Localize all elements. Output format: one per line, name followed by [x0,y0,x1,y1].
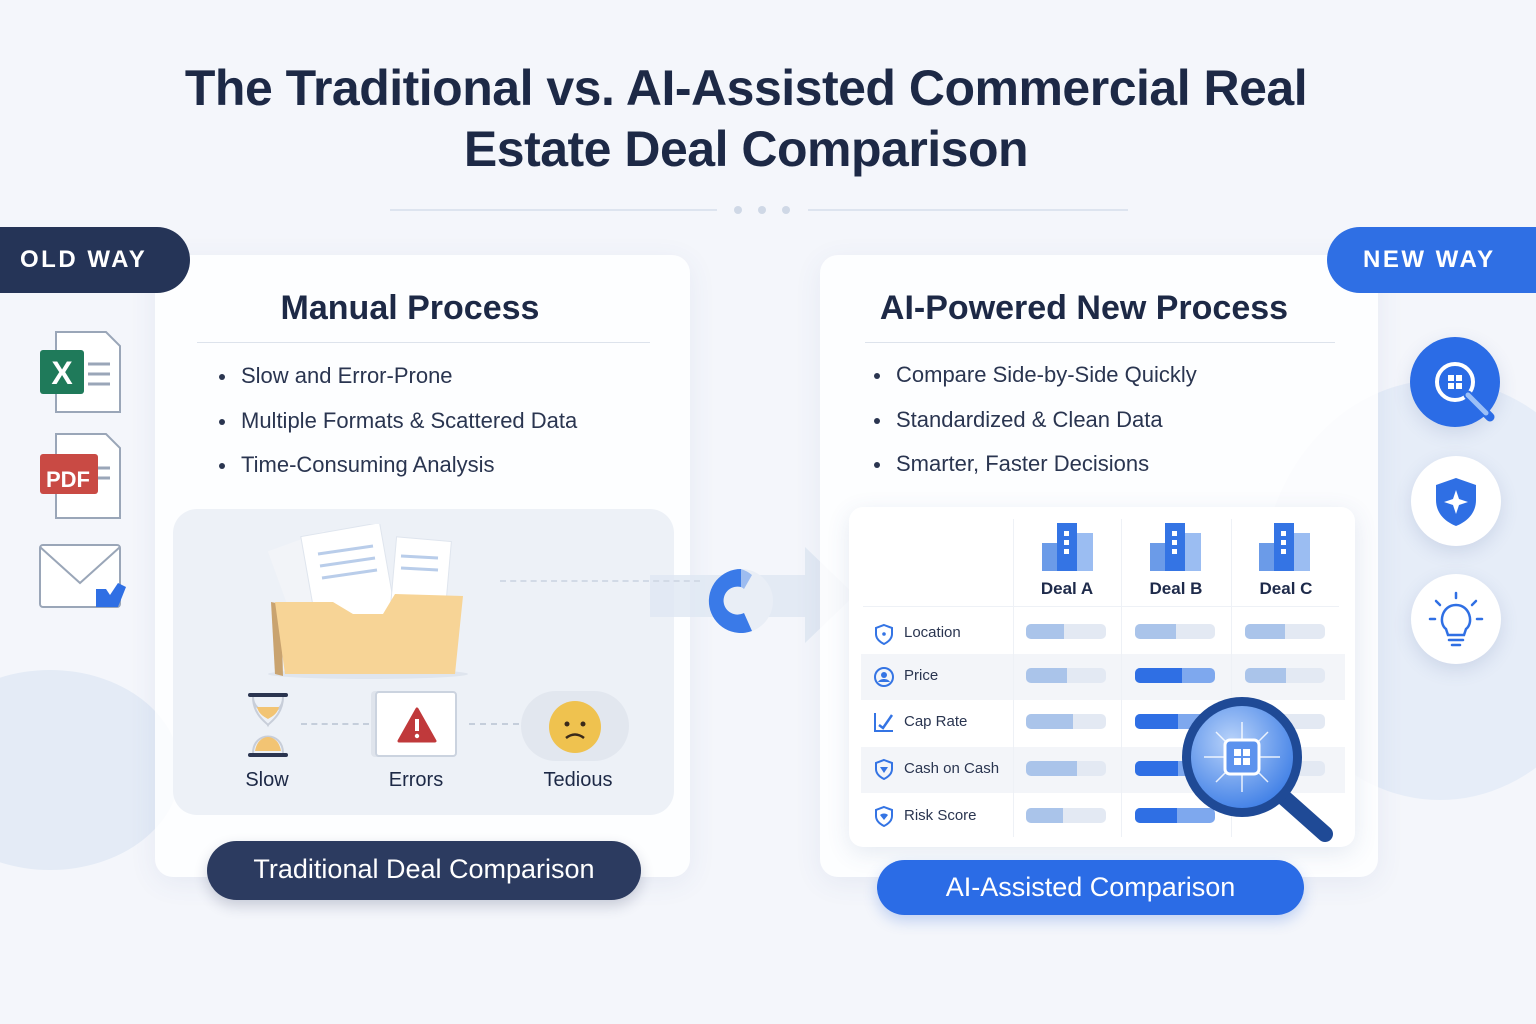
button: traditional deal comparison [207,841,641,900]
row labels: Location [904,624,961,641]
title: The Traditional vs. AI-Assisted Commercial Real [185,60,1307,116]
row labels: Risk Score [904,807,977,824]
bullets: ai: Smarter, Faster Decisions [896,451,1149,476]
bullets: manual: Slow and Error-Prone [241,363,453,388]
row labels: Cash on Cash [904,760,999,777]
labels: slow errors tedious: Slow [245,769,289,791]
icon: pdf file [40,433,121,519]
bars [1026,624,1106,639]
bullets: manual: Multiple Formats & Scattered Data [241,408,577,432]
badge: old way [0,227,190,293]
bullets: manual: Time-Consuming Analysis [241,452,494,477]
row labels: Cap Rate [904,713,967,730]
bullets: ai [874,362,1197,476]
row labels: Price [904,667,938,684]
bullets: ai: Standardized & Clean Data [896,406,1163,432]
icon: lightbulb circle [1411,574,1501,664]
badge: new way [1327,227,1536,293]
row labels [874,624,999,827]
button: traditional deal comparison: Traditional Deal Comparison [253,854,595,884]
button: ai-assisted comparison [877,860,1304,915]
bullets: ai: Compare Side-by-Side Quickly [896,362,1197,387]
icon: excel file: X [51,355,73,391]
labels: slow errors tedious: Tedious [544,769,612,791]
deal headers: Deal A [1041,579,1093,598]
title: Estate Deal Comparison [464,121,1028,177]
badge: new way: NEW WAY [1363,246,1496,273]
arrow: transition [650,547,820,643]
icon: folder with papers [268,524,468,679]
title [185,60,1307,177]
labels: slow errors tedious [245,769,612,791]
heading: manual process: Manual Process [281,289,539,327]
icon: search circle [1410,337,1500,427]
bullets: manual [219,363,578,477]
background blobs [0,670,180,870]
icon: pdf file: PDF [46,467,90,492]
icon: ai magnifier [1182,697,1333,842]
icon: shield circle [1411,456,1501,546]
panel: ai-powered new process [820,255,1378,877]
icon: error warning [375,691,457,757]
deal headers: Deal B [1150,579,1202,598]
icon: hourglass [248,693,288,757]
badge: old way: OLD WAY [20,246,147,273]
deal headers [1041,523,1312,598]
deal headers: Deal C [1260,579,1312,598]
heading: ai-powered: AI-Powered New Process [880,289,1288,327]
comparison table [849,507,1355,847]
button: ai-assisted comparison: AI-Assisted Comparison [946,872,1235,902]
labels: slow errors tedious: Errors [389,769,443,791]
illustration box [173,509,674,815]
icon: sad face [521,691,629,761]
icon: excel file [40,331,121,413]
icon: email [39,544,126,608]
panel: manual process [155,255,690,877]
